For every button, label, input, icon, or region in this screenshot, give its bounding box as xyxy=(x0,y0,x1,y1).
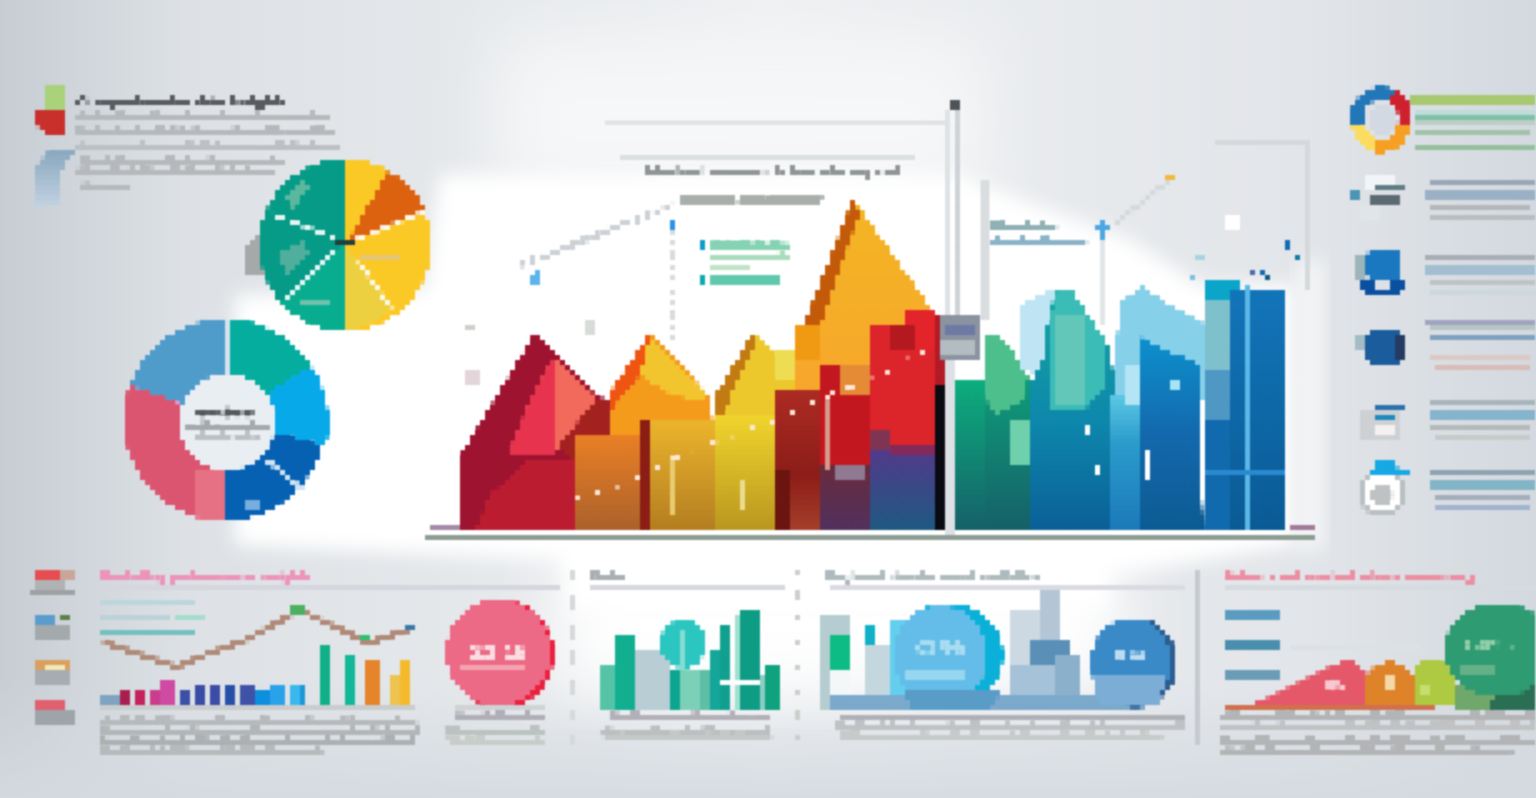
light blue backdrop peak xyxy=(1022,291,1065,380)
list item 4 xyxy=(1357,322,1536,368)
peak 1: red xyxy=(461,333,610,532)
caption xyxy=(605,714,769,741)
icon: coloured ring xyxy=(1357,93,1405,146)
list item 5 xyxy=(1362,398,1536,440)
divider 2 xyxy=(794,568,798,745)
heading: Regional development statistics xyxy=(826,569,1040,584)
heading: top-left title: Comprehensive data insights xyxy=(77,94,287,109)
text block: top-left description: Summary xyxy=(82,184,128,191)
list item 1 xyxy=(1357,93,1536,148)
caption: Urban areas show the largest share of projected gains xyxy=(840,734,1160,741)
caption: product groups in the latest fiscal period xyxy=(1224,724,1536,731)
icon: navy badge xyxy=(1357,332,1403,363)
panel: right column list xyxy=(1352,93,1536,517)
icon: green and red tag xyxy=(36,87,67,137)
chart: cool peaks and columns xyxy=(957,282,1285,532)
text block: Further detail is provided in the report xyxy=(102,749,321,756)
callout: right chart labels: Annual performance xyxy=(993,239,1085,246)
panel: top centre frame xyxy=(435,124,946,407)
peak 4: tall amber xyxy=(793,199,937,440)
peak 2: orange xyxy=(610,333,717,440)
icon: blue fold xyxy=(36,148,77,208)
green peak xyxy=(957,333,1030,532)
text block xyxy=(102,719,420,756)
donut centre label: Market overview xyxy=(185,424,268,431)
donut centre label: Share by region xyxy=(195,434,261,441)
panel: bottom chart 2 xyxy=(590,569,784,741)
pie chart: green and yellow xyxy=(243,159,431,331)
bar chart xyxy=(102,645,414,711)
trend line dots xyxy=(575,350,925,500)
heading: pink: Marketing performance insights xyxy=(100,569,312,584)
icon: clipboard xyxy=(1362,403,1403,438)
heading: centre title: Market research trends report xyxy=(645,164,903,179)
list item 3 xyxy=(1357,250,1536,296)
text block: Analysis of the campaign results over the past few quarters xyxy=(102,719,415,726)
panel: bottom-left icons xyxy=(31,568,77,726)
teal bars xyxy=(600,608,779,711)
heading: Advanced market share summary xyxy=(1224,569,1477,584)
callout: green note: Growth in the xyxy=(712,243,788,250)
caption: return and market share xyxy=(605,734,769,741)
blue city chart xyxy=(820,588,1177,711)
pole with marker box xyxy=(940,97,978,534)
stat caption: Quarterly sales xyxy=(455,714,543,721)
sky peak xyxy=(1112,286,1203,532)
text block: Revenue and audience growth across every regional channel xyxy=(102,729,420,736)
mound chart: 9 xyxy=(1322,679,1346,694)
callout: green note: core segments xyxy=(712,254,788,261)
divider 3 xyxy=(1194,568,1200,745)
text block: top-left description: Compare performance indicators across the business xyxy=(77,144,337,151)
chart: warm peaks and columns xyxy=(461,199,943,532)
panel: bottom chart 4 xyxy=(1224,569,1536,756)
list item 6 xyxy=(1358,461,1536,517)
text block: Investment priorities for the coming period are outlined xyxy=(102,739,415,746)
caption: Share of the total market has expanded for all xyxy=(1224,714,1536,721)
caption: Leading categories hold a stable position xyxy=(1224,739,1536,746)
list item 2 xyxy=(1352,173,1536,219)
caption xyxy=(1224,714,1536,756)
text block: top-left description: Share insights with the whole team xyxy=(77,169,272,176)
mound chart xyxy=(1224,603,1536,711)
callout: right chart labels xyxy=(985,142,1310,325)
panel: bottom chart 3 xyxy=(820,569,1183,741)
callout: right chart labels: Blue cluster xyxy=(993,224,1055,231)
icon: blue globe xyxy=(1357,250,1404,296)
highlight dots xyxy=(1085,380,1182,480)
stat caption: Total percent xyxy=(450,739,541,746)
donut centre label xyxy=(179,374,275,470)
icon: document xyxy=(1352,173,1403,219)
peak 3: yellow xyxy=(717,333,797,420)
donut centre label: Sales xyxy=(195,406,256,420)
caption: Outlook remains positive through next year xyxy=(1224,749,1511,756)
mound chart: 33% xyxy=(1465,637,1513,654)
axis labels left of chart xyxy=(435,322,593,407)
panel: top-left legend xyxy=(36,87,337,208)
text block: top-left description: Track the growth of major segments xyxy=(82,159,282,166)
heading: Data xyxy=(590,569,625,584)
blue city chart: 8% xyxy=(1112,649,1152,666)
caption: Performance by category xyxy=(610,714,769,721)
stat circle: pink: 23 18 xyxy=(471,642,528,664)
caption: Segments ranked by annual xyxy=(605,729,769,736)
panel: bottom chart 1 xyxy=(100,569,558,756)
divider 1 xyxy=(570,568,574,745)
callout arrow: left dotted xyxy=(520,205,675,286)
teal peak xyxy=(1030,291,1115,532)
line chart xyxy=(103,610,413,667)
side labels xyxy=(1224,610,1440,680)
chart axis baseline xyxy=(425,527,1316,541)
callout: green note xyxy=(671,222,788,345)
legend lines xyxy=(102,598,205,634)
caption: Regional development and investments continue to increase overall xyxy=(838,724,1183,731)
blue city chart: O% xyxy=(915,639,965,660)
tall blue tower xyxy=(1203,282,1285,532)
text block: top-left description xyxy=(77,114,337,191)
columns: orange, yellow xyxy=(573,437,643,532)
caption xyxy=(838,716,1183,741)
text block: top-left description: Review trends with data from each monthly report line xyxy=(77,129,333,136)
text block: top-left description: Analyze the metrics and every key performance value xyxy=(77,114,327,121)
text: centre subtitle: Business data overview xyxy=(681,195,821,205)
columns: red xyxy=(773,390,820,532)
stat circle: pink xyxy=(446,599,554,746)
icon: ring with blue cap xyxy=(1358,461,1408,517)
stat caption xyxy=(447,714,543,746)
stat caption: Year on year gain xyxy=(447,729,543,736)
donut chart: multicolour xyxy=(124,319,328,521)
